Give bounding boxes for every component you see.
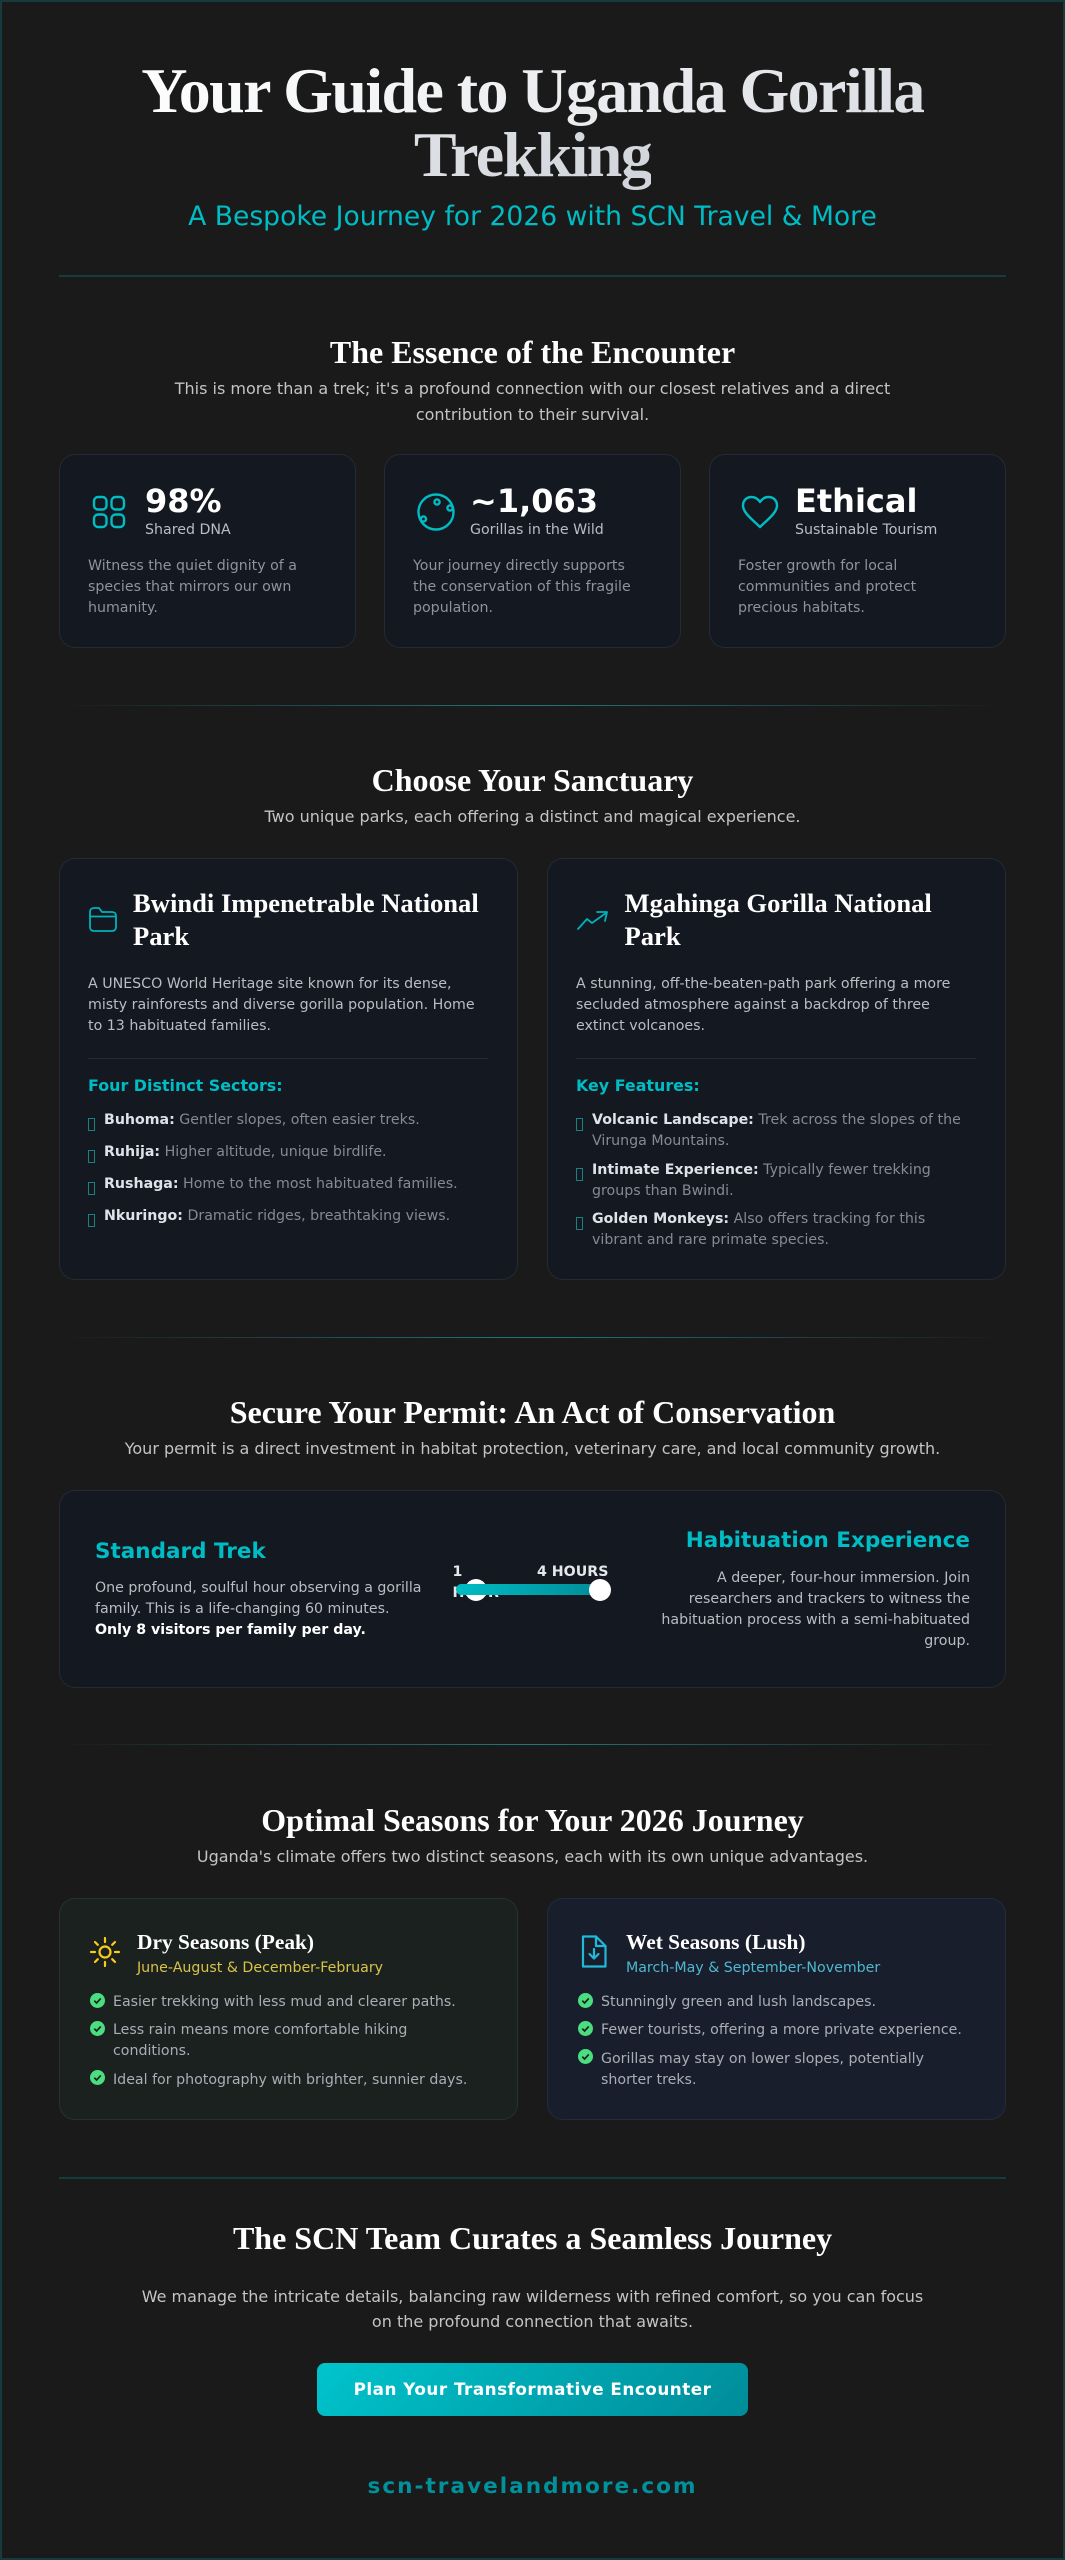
intro text xyxy=(174,379,890,424)
title: Trekking xyxy=(414,119,651,190)
stat value: 98% xyxy=(145,482,222,520)
description: population. xyxy=(413,600,493,616)
sector list xyxy=(88,1112,458,1227)
icon: folder xyxy=(89,907,117,932)
habituation text: A deeper, four-hour immersion. Join xyxy=(717,1570,970,1586)
list heading: Key Features: xyxy=(576,1076,700,1095)
heading: Choose Your Sanctuary xyxy=(372,762,693,798)
title: Your Guide to Uganda Gorilla xyxy=(141,55,924,126)
footer url: scn-travelandmore.com xyxy=(367,2474,698,2499)
feature list: Golden Monkeys: Also offers tracking for this xyxy=(592,1210,925,1226)
season months: June-August & December-February xyxy=(137,1960,383,1976)
panel: ethical tourism xyxy=(709,454,1006,648)
habituation text: researchers and trackers to witness the xyxy=(689,1591,970,1607)
sector list: Rushaga: Home to the most habituated families. xyxy=(104,1176,458,1192)
benefits list xyxy=(578,1993,962,2088)
icon: circle with dots xyxy=(417,493,455,531)
section: the essence of the encounter xyxy=(174,334,890,424)
check icon xyxy=(90,2070,105,2085)
icon: trend arrow xyxy=(577,911,608,930)
sector list: Buhoma: Gentler slopes, often easier treks. xyxy=(104,1112,420,1128)
sector list: Ruhija: Higher altitude, unique birdlife. xyxy=(104,1144,387,1160)
description: Witness the quiet dignity of a xyxy=(88,558,297,574)
description: the conservation of this fragile xyxy=(413,579,631,595)
standard text: Only 8 visitors per family per day. xyxy=(95,1622,366,1638)
heading: Secure Your Permit: An Act of Conservation xyxy=(230,1394,835,1430)
intro text: Uganda's climate offers two distinct seasons, each with its own unique advantages. xyxy=(197,1847,868,1866)
stat label: Shared DNA xyxy=(145,522,231,538)
duration bar xyxy=(456,1584,602,1594)
subtitle: A Bespoke Journey for 2026 with SCN Travel & More xyxy=(188,201,877,232)
description xyxy=(88,558,297,616)
list heading: Four Distinct Sectors: xyxy=(88,1076,283,1095)
description: Foster growth for local xyxy=(738,558,897,574)
icon: document with arrow xyxy=(582,1935,607,1968)
habituation text: habituation process with a semi-habituated xyxy=(661,1612,970,1628)
panel: wet seasons xyxy=(547,1898,1006,2120)
park description: secluded atmosphere against a backdrop of three xyxy=(576,997,930,1013)
icon: sun xyxy=(90,1936,120,1968)
panel: permit comparison xyxy=(59,1490,1006,1688)
title xyxy=(141,55,924,190)
intro text: Two unique parks, each offering a distinct and magical experience. xyxy=(264,807,800,826)
benefit: shorter treks. xyxy=(601,2072,696,2088)
panel: gorillas in the wild xyxy=(384,454,681,648)
check icon xyxy=(578,2021,593,2036)
stat value: ~1,063 xyxy=(470,482,598,520)
heading: Optimal Seasons for Your 2026 Journey xyxy=(261,1802,804,1838)
park description xyxy=(576,976,950,1034)
end label: 4 HOURS xyxy=(537,1564,608,1580)
feature list xyxy=(576,1112,961,1248)
park description: misty rainforests and diverse gorilla population. Home xyxy=(88,997,475,1013)
benefit: Stunningly green and lush landscapes. xyxy=(601,1994,876,2010)
description: species that mirrors our own xyxy=(88,579,291,595)
park description: extinct volcanoes. xyxy=(576,1018,705,1034)
standard heading: Standard Trek xyxy=(95,1539,266,1564)
icon: heart xyxy=(742,496,778,528)
habituation experience xyxy=(661,1528,970,1649)
benefit: Gorillas may stay on lower slopes, potentially xyxy=(601,2050,924,2066)
check icon xyxy=(578,1993,593,2008)
habituation text xyxy=(661,1570,970,1649)
habituation text: group. xyxy=(924,1633,970,1649)
park description: A stunning, off-the-beaten-path park offering a more xyxy=(576,976,950,992)
benefit: Less rain means more comfortable hiking xyxy=(113,2022,407,2038)
intro text: Your permit is a direct investment in habitat protection, veterinary care, and local community growth. xyxy=(125,1439,940,1458)
intro text: This is more than a trek; it's a profound connection with our closest relatives and a direct xyxy=(175,379,890,398)
benefit: Easier trekking with less mud and clearer paths. xyxy=(113,1994,456,2010)
feature list: Virunga Mountains. xyxy=(592,1133,729,1149)
panel: dry seasons xyxy=(59,1898,518,2120)
panel: 98% shared dna xyxy=(59,454,356,648)
description: precious habitats. xyxy=(738,600,865,616)
stat label: Sustainable Tourism xyxy=(795,522,937,538)
standard text: One profound, soulful hour observing a gorilla xyxy=(95,1580,421,1596)
benefit xyxy=(113,2022,407,2059)
park name: Bwindi Impenetrable National xyxy=(133,888,479,918)
benefit xyxy=(601,2050,924,2088)
description xyxy=(413,558,631,616)
button xyxy=(317,2363,748,2416)
start marker xyxy=(465,1578,487,1600)
park description: to 13 habituated families. xyxy=(88,1018,271,1034)
section: choose your sanctuary xyxy=(264,762,800,826)
check icon xyxy=(90,1993,105,2008)
benefit: Fewer tourists, offering a more private experience. xyxy=(601,2022,962,2038)
park name: Park xyxy=(133,921,189,951)
description: communities and protect xyxy=(738,579,916,595)
start label xyxy=(452,1564,499,1601)
section: secure your permit xyxy=(124,1394,940,1458)
feature list: Volcanic Landscape: Trek across the slopes of the xyxy=(592,1112,961,1128)
park description xyxy=(88,976,475,1034)
feature list: vibrant and rare primate species. xyxy=(592,1232,829,1248)
sector list: Nkuringo: Dramatic ridges, breathtaking views. xyxy=(104,1208,450,1224)
panel: bwindi park xyxy=(59,858,518,1280)
feature list: Intimate Experience: Typically fewer trekking xyxy=(592,1162,931,1178)
park name xyxy=(133,888,479,951)
standard trek xyxy=(95,1539,421,1638)
season title: Dry Seasons (Peak) xyxy=(137,1930,314,1954)
timeline: 1 hour to 4 hours xyxy=(452,1564,611,1601)
park name: Park xyxy=(624,921,681,951)
button: Plan Your Transformative Encounter xyxy=(354,2379,711,2399)
body text xyxy=(142,2287,923,2331)
stat value: Ethical xyxy=(795,482,917,520)
habituation heading: Habituation Experience xyxy=(686,1528,970,1553)
standard text: family. This is a life-changing 60 minutes. xyxy=(95,1601,390,1617)
heading: The Essence of the Encounter xyxy=(330,334,735,370)
check icon xyxy=(578,2049,593,2064)
park name: Mgahinga Gorilla National xyxy=(624,888,932,918)
intro text: contribution to their survival. xyxy=(416,405,649,424)
description xyxy=(738,558,916,616)
start label: HOUR xyxy=(452,1585,499,1601)
park name xyxy=(624,888,932,951)
heading: The SCN Team Curates a Seamless Journey xyxy=(233,2220,832,2256)
season months: March-May & September-November xyxy=(626,1960,880,1976)
body text: on the profound connection that awaits. xyxy=(372,2312,693,2331)
icon: four squares xyxy=(92,496,126,528)
feature list: groups than Bwindi. xyxy=(592,1183,734,1199)
section: optimal seasons xyxy=(197,1802,868,1866)
section: call to action xyxy=(142,2220,923,2416)
season title: Wet Seasons (Lush) xyxy=(626,1930,805,1954)
stat label: Gorillas in the Wild xyxy=(470,522,604,538)
standard text xyxy=(95,1580,421,1638)
benefit: conditions. xyxy=(113,2043,190,2059)
end marker xyxy=(589,1578,611,1600)
benefits list xyxy=(90,1993,467,2088)
benefit: Ideal for photography with brighter, sunnier days. xyxy=(113,2072,467,2088)
start label: 1 xyxy=(452,1564,462,1580)
body text: We manage the intricate details, balancing raw wilderness with refined comfort, so you can focus xyxy=(142,2287,923,2306)
description: Your journey directly supports xyxy=(413,558,625,574)
description: humanity. xyxy=(88,600,158,616)
check icon xyxy=(90,2021,105,2036)
panel: mgahinga park xyxy=(547,858,1006,1280)
park description: A UNESCO World Heritage site known for its dense, xyxy=(88,976,452,992)
